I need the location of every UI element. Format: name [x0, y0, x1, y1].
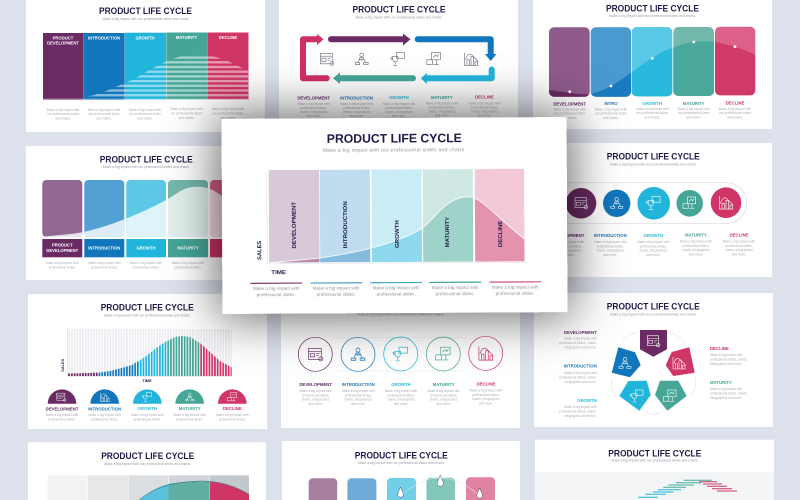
stage labels: DEVELOPMENT [297, 96, 330, 100]
stage labels: and more. [349, 114, 364, 118]
subtitle: Make a big impact with our professional slides and charts. [104, 462, 191, 466]
node labels: charts, infographics [596, 248, 625, 252]
circle labels: and more. [479, 402, 493, 406]
arrow: growth [418, 39, 496, 61]
right labels: professional slides, charts, [710, 392, 748, 396]
marker labels: professional slides. [219, 417, 246, 421]
heading: PRODUCT LIFE CYCLE [99, 6, 192, 16]
subtitle: Make a big impact with our professional slides and charts. [356, 16, 442, 20]
stage descriptions: our professional slides [47, 112, 79, 116]
circle labels: Make a big impact with [385, 389, 417, 393]
marker labels: DEVELOPMENT [46, 406, 79, 411]
circle labels: professional slides, [345, 393, 372, 397]
left labels: Make a big impact with [564, 405, 597, 409]
stage descriptions: Make a big impact with [170, 107, 203, 111]
column labels: and charts. [562, 116, 578, 120]
stage descriptions: Make a big impact with [212, 107, 244, 111]
stage note: growth: Make a big impact with [373, 285, 420, 290]
heading: PRODUCT LIFE CYCLE [355, 450, 448, 460]
node labels: Make a big impact with [723, 240, 755, 244]
column labels: Make a big impact with [553, 108, 586, 112]
right labels: professional slides, charts, [710, 358, 748, 362]
right labels: DECLINE [710, 346, 729, 351]
striped stage chart: PRODUCT [53, 36, 74, 40]
circle labels [299, 382, 502, 406]
marker labels: MATURITY [179, 406, 201, 411]
circle labels: GROWTH [391, 382, 411, 387]
panel: slide with circle timeline [500, 143, 772, 277]
heading: PRODUCT LIFE CYCLE [608, 448, 701, 458]
stage descriptions: Make a big impact with [46, 261, 79, 265]
node labels: professional slides, [554, 244, 582, 248]
circle labels: charts, infographics [472, 397, 500, 401]
striped stage chart: GROWTH [135, 36, 155, 40]
rounded column chart [549, 26, 756, 98]
marker labels: INTRODUCTION [88, 406, 121, 411]
center card shadow [221, 117, 568, 314]
stage descriptions: professional slides. [91, 265, 118, 269]
arrow: decline [333, 72, 413, 84]
pentagon: decline [666, 347, 695, 376]
stage label boxes: GROWTH [136, 246, 156, 250]
circle labels: Make a big impact with [342, 389, 375, 393]
node labels: and more. [561, 253, 575, 257]
right labels: Make a big impact with [710, 353, 743, 357]
column labels: and charts. [603, 116, 619, 120]
axis label: sales: SALES [60, 359, 65, 372]
node labels: charts, infographics [639, 248, 668, 252]
circle labels: charts, infographics [430, 398, 458, 402]
panel: slide with stair steps [535, 440, 774, 500]
column labels: INTRO [604, 101, 618, 106]
arrow: introduction [331, 34, 410, 46]
column labels: and charts. [686, 116, 702, 120]
left labels: professional slides, charts, [559, 341, 597, 345]
stage descriptions: and charts. [55, 116, 71, 120]
stage note: development: professional slides. [257, 292, 296, 297]
node labels: MATURITY [685, 232, 707, 238]
connector lines [337, 338, 467, 371]
pentagon: maturity [655, 381, 687, 411]
node labels: Make a big impact with [594, 240, 627, 244]
left labels: professional slides, charts, [559, 376, 597, 380]
stage descriptions: Make a big impact with [88, 261, 121, 265]
stage descriptions: professional slides. [49, 265, 76, 269]
striped stage chart: INTRODUCTION [88, 36, 120, 40]
panel: slide with striped five-stage chart [26, 0, 265, 132]
process icons [320, 53, 478, 65]
striped stage chart [43, 32, 249, 100]
node labels: DEVELOPMENT [552, 233, 585, 238]
stage labels [297, 94, 501, 118]
arrow: maturity [421, 70, 492, 84]
panel: slide with arch chart [28, 442, 266, 500]
stage labels: Make a big impact with [426, 102, 458, 106]
stage labels: and more. [392, 114, 406, 118]
marker labels: Make a big impact with [88, 413, 121, 417]
column labels: and charts. [727, 116, 743, 120]
right labels [710, 346, 748, 400]
panel: slide with columns and label boxes [26, 146, 222, 280]
circle labels: charts, infographics [344, 398, 373, 402]
circle labels: DECLINE [477, 382, 496, 386]
subtitle: Make a big impact with our professional slides and charts. [103, 165, 190, 169]
stage descriptions: Make a big impact with [172, 261, 204, 265]
stage note: introduction: Make a big impact with [313, 285, 360, 291]
stage labels: Make a big impact with [340, 102, 373, 106]
pentagon: development [640, 330, 667, 357]
axis label: time: TIME [142, 378, 152, 383]
node labels: Make a big impact with [552, 240, 584, 244]
marker labels: Make a big impact with [46, 413, 78, 417]
marker labels: Make a big impact with [131, 413, 164, 417]
subtitle: Make a big impact with our professional slides and charts. [610, 312, 697, 316]
panel: slide with rounded columns and curve [533, 0, 772, 129]
circle labels: professional slides, [472, 393, 500, 397]
pentagon: growth [619, 381, 651, 411]
column chart with white curve area [42, 180, 222, 237]
stage labels: charts, infographics [428, 110, 456, 114]
stage descriptions: our professional slides [129, 112, 161, 116]
node labels: professional slides, [597, 244, 624, 248]
stage descriptions: and charts. [220, 116, 236, 120]
circle labels: DEVELOPMENT [299, 382, 332, 387]
stage labels: charts, infographics [300, 110, 328, 114]
stage labels: professional slides, [385, 106, 413, 110]
circle labels: professional slides, [387, 393, 415, 397]
stage labels: professional slides, [300, 106, 327, 110]
stage note: maturity: professional slides. [436, 291, 475, 296]
column labels: MATURITY [683, 101, 705, 106]
stage labels: MATURITY [431, 95, 453, 100]
column labels: Make a big impact with [677, 107, 710, 111]
node labels: Make a big impact with [680, 240, 712, 244]
node labels: and more. [603, 253, 618, 257]
circle labels: charts, infographics [387, 398, 415, 402]
axis label: time: TIME [271, 270, 286, 276]
marker labels: professional slides. [134, 417, 161, 421]
stage descriptions [46, 261, 204, 269]
pentagon: introduction [612, 347, 641, 377]
right labels: infographics and more. [710, 362, 743, 366]
left labels [559, 330, 597, 418]
stage columns with area curve [269, 169, 525, 263]
panel: slide with bar histogram [28, 294, 267, 429]
pill outline [545, 183, 747, 223]
marker labels: professional slides. [48, 417, 76, 421]
node labels: charts, infographics [682, 248, 710, 252]
circle labels: professional slides, [302, 393, 329, 397]
circle labels: Make a big impact with [470, 388, 502, 392]
left labels: Make a big impact with [564, 371, 597, 375]
node labels: and more. [646, 253, 661, 257]
half circle icons [57, 393, 237, 401]
stage note: growth: professional slides. [377, 291, 416, 297]
stage note: maturity [429, 282, 481, 296]
marker labels: professional slides. [176, 417, 203, 421]
stage note: decline: Make a big impact with [492, 285, 539, 290]
stage note: decline: professional slides. [496, 291, 535, 296]
subtitle: Make a big impact with our professional slides and charts. [609, 14, 696, 18]
right labels: MATURITY [710, 380, 732, 385]
circle labels: Make a big impact with [299, 389, 332, 393]
stage labels: charts, infographics [385, 110, 413, 114]
subtitle: Make a big impact with our professional slides and charts. [104, 313, 191, 317]
stage descriptions [47, 107, 244, 120]
stage descriptions: Make a big impact with [129, 108, 161, 112]
column label: introduction: INTRODUCTION [343, 201, 349, 248]
left labels: infographics and more. [564, 346, 597, 350]
marker labels: DECLINE [223, 406, 242, 411]
left labels: professional slides, charts, [559, 410, 597, 414]
stage labels: and more. [477, 114, 492, 118]
column labels: DECLINE [726, 100, 745, 105]
outline circles with icons [298, 336, 503, 371]
circle labels: and more. [394, 402, 408, 406]
stage label boxes [42, 239, 250, 257]
node labels: and more. [689, 252, 703, 256]
column label: decline: DECLINE [498, 220, 504, 247]
pentagon icons [619, 336, 686, 402]
column labels: Make a big impact with [595, 108, 627, 112]
right labels: Make a big impact with [710, 387, 743, 391]
stage descriptions: professional slides. [174, 265, 202, 269]
stage descriptions: our professional slides [88, 112, 120, 116]
striped stage chart: DECLINE [219, 35, 237, 40]
main heading: PRODUCT LIFE CYCLE [327, 131, 462, 146]
panel: slide with pin columns [282, 441, 520, 500]
node labels: charts, infographics [725, 248, 753, 252]
subtitle: Make a big impact with our professional slides and charts. [610, 162, 697, 166]
heading: PRODUCT LIFE CYCLE [100, 154, 193, 164]
stage descriptions: and charts. [137, 116, 153, 120]
stage labels: Make a big impact with [383, 102, 415, 106]
striped stage chart: MATURITY [176, 35, 197, 40]
stage labels: professional slides, [471, 106, 498, 110]
node labels: and more. [732, 252, 746, 256]
axis label: sales: SALES [257, 240, 263, 260]
left labels: infographics and more. [564, 380, 597, 384]
stage descriptions: and charts. [179, 116, 194, 120]
stage descriptions: our professional slides [171, 112, 203, 116]
column labels: DEVELOPMENT [553, 101, 586, 106]
marker labels: professional slides. [91, 417, 118, 421]
circle labels: and more. [437, 402, 451, 406]
stage note: maturity: Make a big impact with [432, 285, 479, 290]
node labels: charts, infographics [554, 248, 582, 252]
column labels [553, 100, 751, 120]
circle nodes with icons [566, 187, 741, 220]
column labels: Make a big impact with [719, 107, 751, 111]
column labels: our professional slides [636, 111, 669, 115]
column label: maturity: MATURITY [445, 217, 451, 247]
stage labels: professional slides, [428, 106, 456, 110]
node labels: Make a big impact with [637, 240, 670, 244]
panel: main product life cycle slide [221, 117, 568, 314]
marker labels: Make a big impact with [216, 413, 249, 417]
stage labels: charts, infographics [343, 110, 371, 114]
stage note: development: Make a big impact with [253, 286, 300, 291]
node labels [552, 232, 755, 257]
marker labels: GROWTH [138, 406, 157, 411]
node labels: INTRODUCTION [594, 233, 627, 238]
column labels: and charts. [644, 116, 660, 120]
node labels: professional slides, [640, 244, 667, 248]
subtitle: Make a big impact with our professional slides and charts. [611, 458, 698, 462]
panel: slide with pentagon cycle [534, 293, 773, 427]
panel: slide with cycle arrows [279, 0, 518, 130]
stage note: decline [489, 281, 541, 296]
stage descriptions: Make a big impact with [130, 261, 162, 265]
left labels: infographics and more. [564, 414, 597, 418]
subtitle: Make a big impact with our professional slides and charts. [103, 17, 189, 21]
stage labels: INTRODUCTION [340, 95, 373, 100]
stage labels: GROWTH [389, 95, 409, 100]
stage labels: and more. [435, 114, 449, 118]
heading: PRODUCT LIFE CYCLE [607, 152, 700, 162]
left labels: Make a big impact with [564, 336, 597, 340]
column labels: our professional slides [554, 112, 586, 116]
circle labels: and more. [351, 402, 366, 406]
node labels: GROWTH [644, 233, 663, 238]
stage note: growth [370, 282, 422, 297]
heading: PRODUCT LIFE CYCLE [606, 3, 699, 13]
stage labels: professional slides, [343, 106, 370, 110]
stage descriptions: Make a big impact with [47, 108, 79, 112]
subtitle: Make a big impact with our professional slides and charts. [358, 461, 445, 465]
striped stage chart: DEVELOPMENT [47, 40, 79, 46]
column labels: our professional slides [595, 112, 627, 116]
circle labels: INTRODUCTION [342, 382, 375, 387]
stage labels: DECLINE [475, 94, 494, 100]
column labels: GROWTH [643, 101, 662, 106]
stage label boxes: DEVELOPMENT [46, 248, 79, 253]
circle labels: and more. [309, 402, 323, 406]
node labels: professional slides, [682, 244, 710, 248]
marker labels [46, 406, 249, 421]
left labels: GROWTH [577, 398, 597, 403]
stage descriptions: and charts. [96, 116, 112, 120]
circle labels: professional slides, [430, 393, 457, 397]
stage labels: Make a big impact with [297, 102, 330, 106]
stage labels: charts, infographics [471, 110, 499, 114]
stage descriptions: professional slides. [132, 265, 160, 269]
stage labels: and more. [307, 114, 321, 118]
right labels: infographics and more. [710, 396, 743, 400]
stage label boxes: PRODUCT [52, 242, 73, 248]
stage note: introduction [310, 282, 362, 297]
column label: growth: GROWTH [395, 220, 401, 248]
marker labels: Make a big impact with [173, 413, 206, 417]
stage descriptions: Make a big impact with [88, 108, 120, 112]
stage label boxes: MATURITY [177, 246, 199, 250]
circle labels: MATURITY [433, 382, 455, 387]
main subtitle: Make a big impact with our professional slides and charts. [323, 147, 466, 154]
pin columns [309, 475, 495, 500]
connector arcs [611, 333, 696, 414]
arch chart [48, 475, 249, 500]
column labels: our professional slides [719, 111, 751, 115]
left labels: INTRODUCTION [564, 364, 597, 368]
heading: PRODUCT LIFE CYCLE [607, 302, 700, 312]
circle labels: charts, infographics [302, 398, 330, 402]
heading: PRODUCT LIFE CYCLE [352, 4, 446, 14]
stage labels: Make a big impact with [468, 102, 501, 106]
stage note: introduction: professional slides. [317, 292, 356, 297]
bar histogram [68, 328, 232, 376]
heading: PRODUCT LIFE CYCLE [101, 451, 194, 461]
node labels: DECLINE [730, 232, 749, 237]
column labels: Make a big impact with [636, 107, 669, 111]
panel: slide with outline circles [281, 290, 520, 428]
half circle markers [48, 389, 247, 404]
axes [267, 169, 528, 264]
arrow: development [303, 34, 327, 78]
stage label boxes: INTRODUCTION [88, 246, 120, 250]
column labels: our professional slides [678, 111, 710, 115]
left labels: DEVELOPMENT [564, 330, 597, 335]
circle labels: Make a big impact with [427, 389, 460, 393]
heading: PRODUCT LIFE CYCLE [101, 303, 194, 313]
node labels: professional slides, [725, 244, 753, 248]
stage note: development [250, 282, 302, 297]
stair step chart [535, 472, 774, 500]
column label: development: DEVELOPMENT [292, 201, 298, 249]
stage descriptions: our professional slides [212, 112, 244, 116]
subtitle: Make a big impact with our professional slides and charts. [357, 312, 444, 316]
